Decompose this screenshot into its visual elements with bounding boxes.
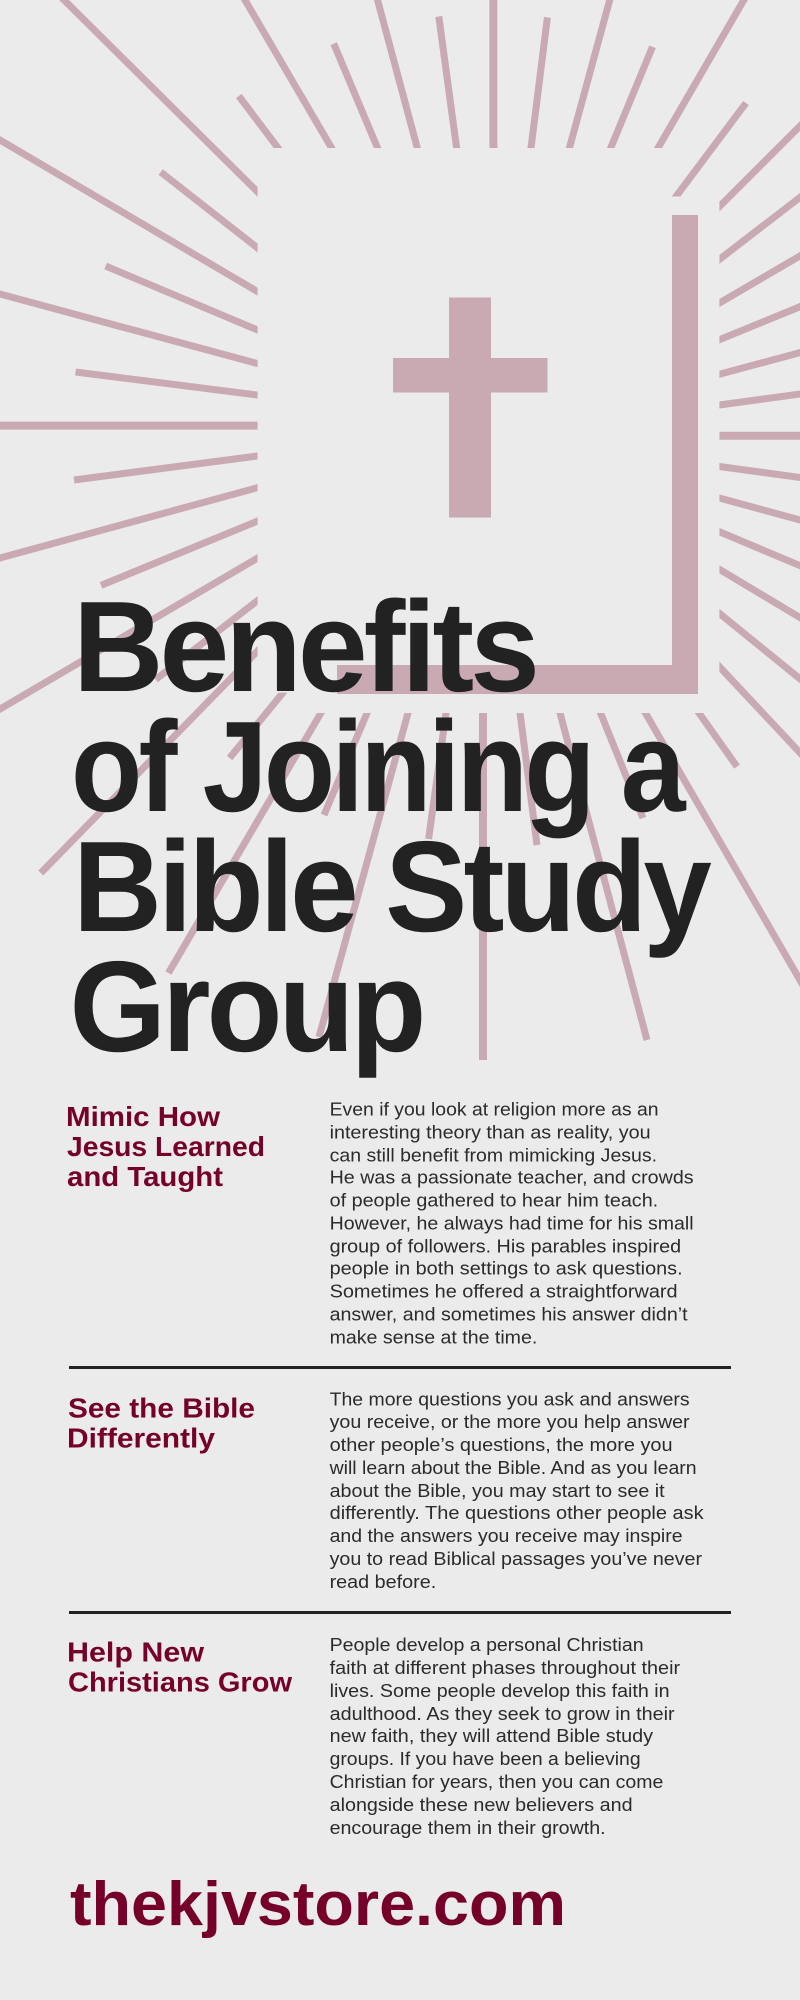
text block: section 2 body: you receive, or the more you help answer (330, 1411, 690, 1432)
title: Group (70, 935, 422, 1079)
text block: section 2 body: read before. (330, 1571, 436, 1592)
title: Benefits (73, 575, 536, 719)
text block: section 3 body: lives. Some people develop this faith in (330, 1680, 670, 1701)
text block: section 2 body: you to read Biblical passages you’ve never (330, 1548, 702, 1569)
heading: See the Bible Differently: See the Bible (68, 1392, 255, 1423)
text block: section 1 body: He was a passionate teacher, and crowds (330, 1167, 694, 1188)
heading: Mimic How Jesus Learned and Taught: Jesus Learned (67, 1131, 265, 1162)
text block: section 1 body: of people gathered to hear him teach. (330, 1190, 658, 1211)
text block: section 1 body: people in both settings to ask questions. (330, 1258, 683, 1279)
radiating light rays (0, 0, 800, 1060)
text block: section 1 body: Sometimes he offered a straightforward (330, 1280, 678, 1301)
text block: section 1 body: Even if you look at religion more as an (330, 1098, 659, 1119)
heading: Help New Christians Grow (67, 1637, 292, 1698)
text block: section 3 body: new faith, they will attend Bible study (330, 1725, 654, 1746)
text block: section 2 body: other people’s questions, the more you (330, 1434, 673, 1455)
text block: section 3 body: People develop a personal Christian (330, 1634, 644, 1655)
text block: section 3 body: alongside these new believers and (330, 1794, 633, 1815)
heading: Mimic How Jesus Learned and Taught: Mimic How (66, 1101, 220, 1132)
text block: section 2 body: differently. The questions other people ask (330, 1502, 704, 1523)
title: Bible Study (73, 815, 712, 959)
text block: section 3 body: encourage them in their growth. (330, 1817, 606, 1838)
heading: See the Bible Differently (67, 1392, 255, 1453)
text block: section 1 body: However, he always had time for his small (330, 1213, 694, 1234)
divider 1 (69, 1366, 731, 1369)
text block: section 2 body: The more questions you ask and answers (330, 1389, 690, 1410)
heading: Help New Christians Grow: Help New (67, 1637, 204, 1668)
heading: Mimic How Jesus Learned and Taught (66, 1101, 265, 1192)
title (70, 575, 712, 1079)
text block: section 1 body: answer, and sometimes his answer didn’t (330, 1304, 688, 1325)
text block: section 1 body (330, 1098, 694, 1348)
footer website: thekjvstore.com (70, 1870, 566, 1939)
icon: Bible book with cross (258, 148, 719, 713)
text block: section 2 body (329, 1389, 704, 1592)
text block: section 3 body: adulthood. As they seek to grow in their (330, 1703, 675, 1724)
text block: section 1 body: interesting theory than as reality, you (330, 1121, 651, 1142)
text block: section 3 body: Christian for years, then you can come (330, 1771, 663, 1792)
text block: section 3 body: faith at different phases throughout their (330, 1657, 680, 1678)
text block: section 1 body: make sense at the time. (330, 1327, 537, 1348)
heading: Mimic How Jesus Learned and Taught: and Taught (67, 1161, 223, 1192)
text block: section 3 body (330, 1634, 680, 1838)
divider 2 (69, 1611, 731, 1614)
text block: section 1 body: group of followers. His parables inspired (330, 1236, 681, 1257)
text block: section 2 body: about the Bible, you may start to see it (330, 1480, 665, 1501)
text block: section 2 body: will learn about the Bible. And as you learn (329, 1457, 697, 1478)
text block: section 3 body: groups. If you have been a believing (330, 1748, 641, 1769)
title: of Joining a (71, 695, 687, 839)
heading: See the Bible Differently: Differently (67, 1422, 215, 1453)
text block: section 1 body: can still benefit from mimicking Jesus. (330, 1145, 657, 1166)
text block: section 2 body: and the answers you receive may inspire (330, 1525, 683, 1546)
heading: Help New Christians Grow: Christians Grow (68, 1667, 292, 1698)
